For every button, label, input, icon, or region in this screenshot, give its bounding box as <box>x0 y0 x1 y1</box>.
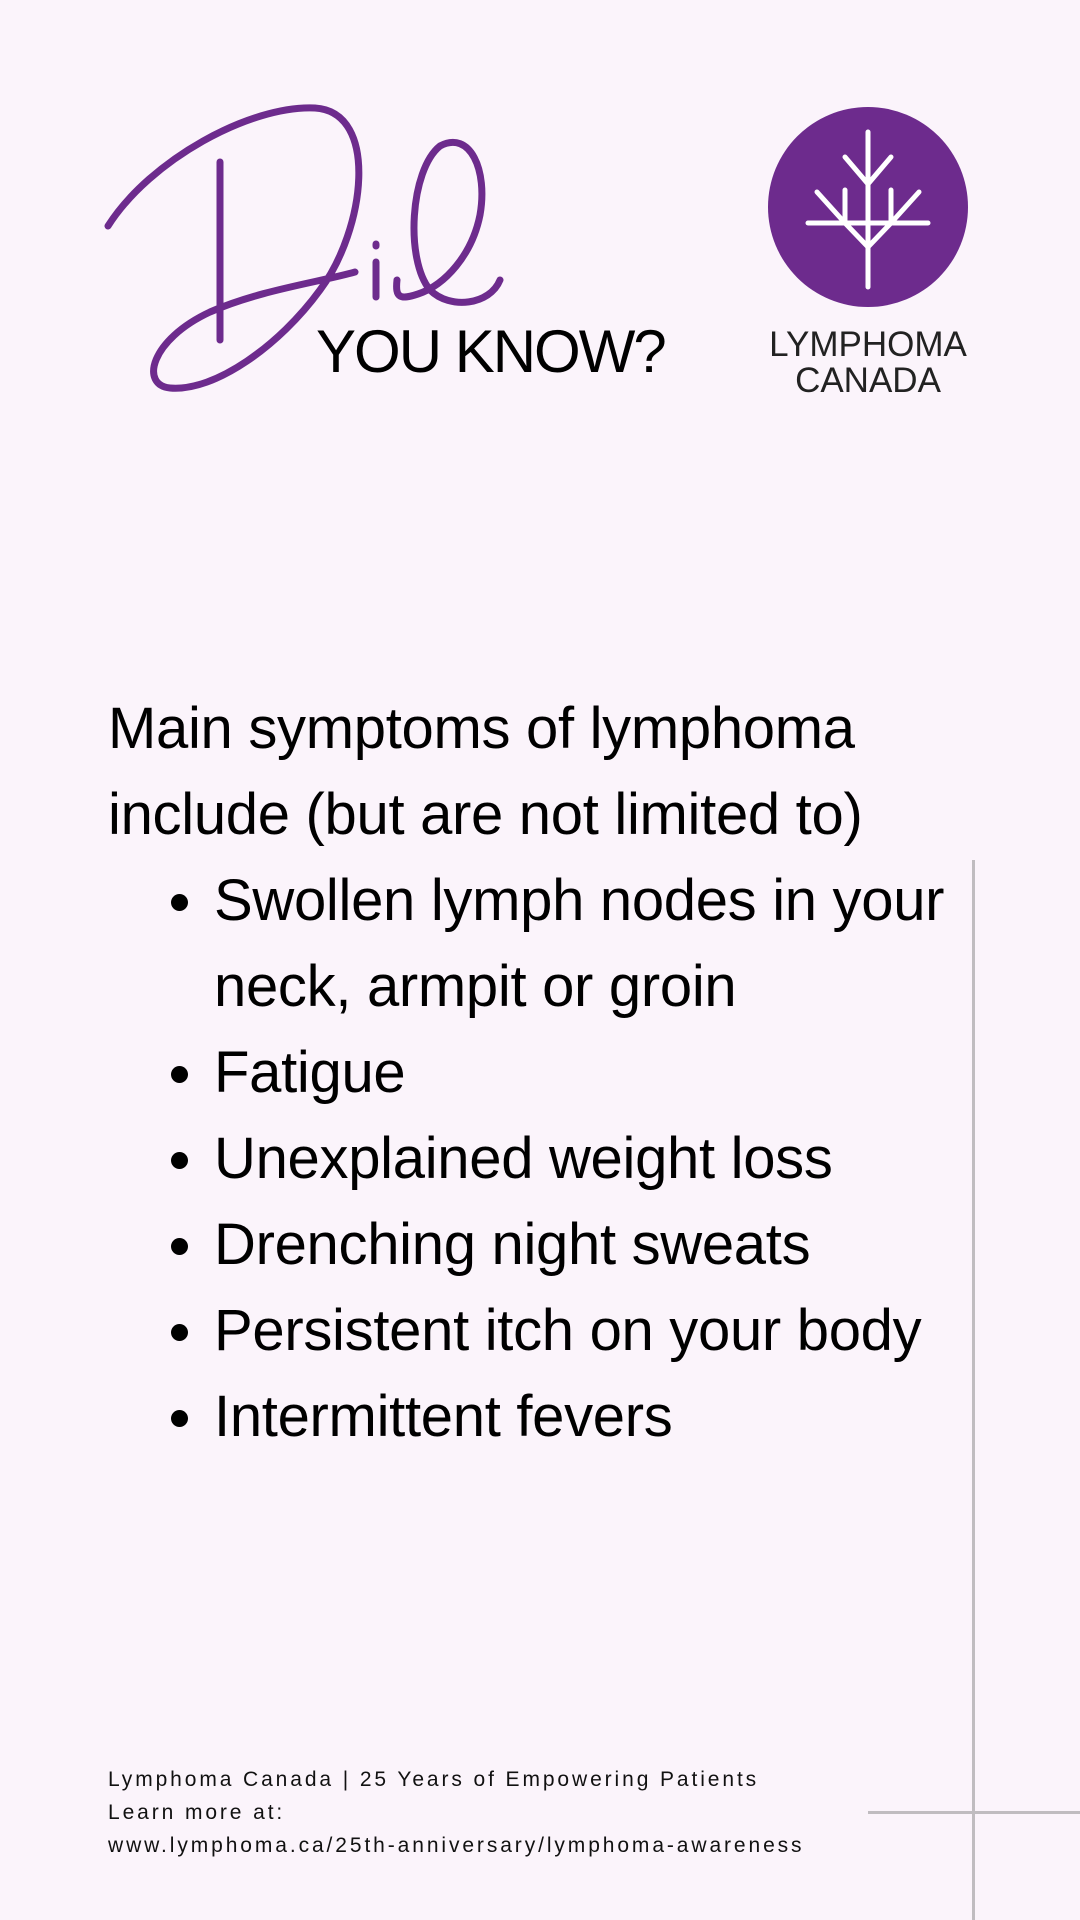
title script: Did <box>104 104 504 392</box>
symptom list: Swollen lymph nodes in your <box>214 868 944 933</box>
footer: Learn more at: <box>108 1801 285 1824</box>
icon: tree in purple circle <box>768 107 968 307</box>
logo text: CANADA <box>795 361 941 400</box>
footer: Lymphoma Canada | 25 Years of Empowering Patients <box>108 1768 759 1791</box>
heading: YOU KNOW?: YOU KNOW? <box>316 318 665 385</box>
logo text: LYMPHOMA <box>769 325 967 364</box>
symptom list: Unexplained weight loss <box>214 1126 833 1191</box>
symptom list: Persistent itch on your body <box>214 1298 921 1363</box>
symptom list: Intermittent fevers <box>214 1384 672 1449</box>
text block: symptoms: include (but are not limited to) <box>108 782 862 847</box>
text block: symptoms: Main symptoms of lymphoma <box>108 696 855 761</box>
logo text <box>769 325 967 400</box>
symptom list: Drenching night sweats <box>214 1212 810 1277</box>
logo: Lymphoma Canada <box>768 107 968 400</box>
symptom list: neck, armpit or groin <box>214 954 736 1019</box>
footer: www.lymphoma.ca/25th-anniversary/lymphoma-awareness <box>108 1834 804 1857</box>
symptom list <box>171 868 944 1449</box>
footer <box>108 1768 804 1857</box>
symptom list: Fatigue <box>214 1040 405 1105</box>
text block: symptoms <box>108 696 944 1449</box>
